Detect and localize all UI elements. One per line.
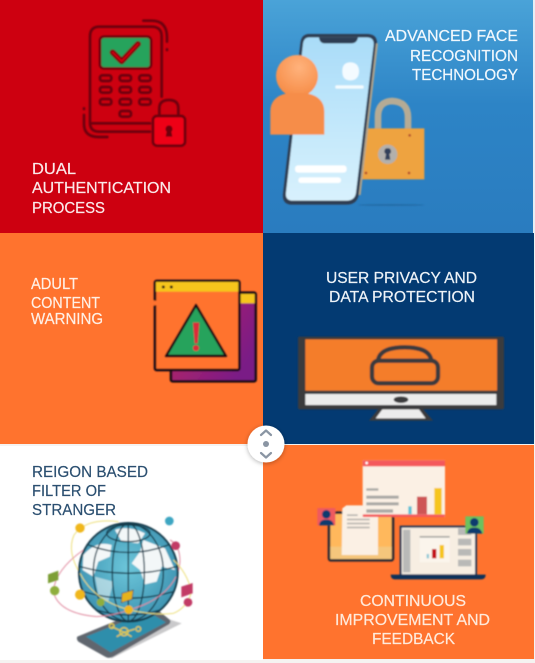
icon: screens with charts and users [317,460,486,579]
globe [79,523,178,622]
heading: continuous improvement and feedback: IMPROVEMENT AND [335,612,490,629]
user badge green [465,516,484,534]
tablet [329,513,393,560]
laptop [401,527,476,575]
heading: dual authentication process: PROCESS [32,200,105,217]
heading: region based filter of stranger [32,464,148,519]
heading: adult content warning: CONTENT [31,295,100,312]
heading: dual authentication process [32,161,171,217]
heading: dual authentication process: DUAL [32,161,76,178]
padlock [378,101,408,128]
rear orbits [71,521,118,573]
heading: user privacy and data protection: USER PRIVACY AND [326,270,477,287]
icon: globe over phone [48,517,193,658]
icon: phone, person and padlock [270,34,425,206]
heading: adult content warning: WARNING [31,311,103,328]
heading: region based filter of stranger: REIGON BASED [32,464,148,481]
icon: warning browser windows [153,281,256,381]
heading: dual authentication process: AUTHENTICATION [32,180,171,197]
icon: keypad device with padlock [84,21,185,146]
nodes [75,523,85,533]
heading: advanced face recognition technology: ADVANCED FACE [385,28,518,45]
panel: face recognition [263,0,535,233]
phone under globe [78,612,182,658]
panel: dual authentication [0,0,263,233]
front orbits [80,560,192,614]
panel: region based filter [0,446,263,660]
user badge pink [317,508,335,525]
heading: continuous improvement and feedback [335,593,490,648]
chart window [363,460,445,517]
heading: advanced face recognition technology [385,28,518,84]
heading: region based filter of stranger: FILTER OF [32,483,106,500]
heading: adult content warning [31,276,103,328]
panel: privacy and data protection [263,233,534,444]
panel: adult content warning [0,233,263,444]
phone [283,34,377,205]
heading: user privacy and data protection [326,270,477,306]
scroll handle button [248,426,284,462]
heading: user privacy and data protection: DATA PROTECTION [329,289,475,306]
panel: continuous improvement [263,445,534,659]
icon: monitor with padlock [298,337,504,421]
heading: region based filter of stranger: STRANGER [32,502,116,519]
person [276,55,318,97]
heading: continuous improvement and feedback: CONTINUOUS [360,593,466,610]
heading: adult content warning: ADULT [31,276,78,293]
heading: advanced face recognition technology: TECHNOLOGY [412,67,518,84]
heading: continuous improvement and feedback: FEEDBACK [372,631,455,648]
heading: advanced face recognition technology: RECOGNITION [410,48,518,65]
